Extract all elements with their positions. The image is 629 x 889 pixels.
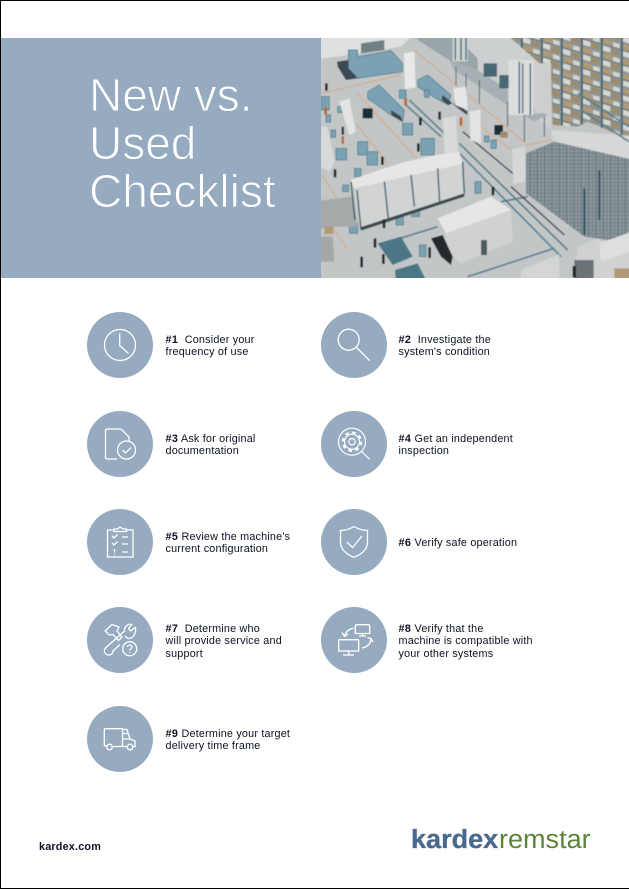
text: item 1: #1 Consider your: [166, 334, 255, 346]
footer website: kardex.com: [39, 841, 101, 853]
text: item 2: #2 Investigate the: [398, 334, 491, 346]
text: item 5: current configuration: [166, 543, 268, 555]
text: item 4: #4 Get an independent: [398, 433, 513, 445]
logo: kardex remstar: kardex: [411, 826, 498, 854]
checklist item 2: [321, 312, 491, 378]
text: item 6: #6 Verify safe operation: [398, 536, 517, 548]
dark machine bases: [337, 60, 468, 122]
icon: clipboard checklist: [87, 509, 153, 575]
high-bay shelving: [498, 27, 629, 145]
title: Checklist: [89, 164, 276, 216]
light floor patch: [551, 130, 629, 170]
wall below large unit: [311, 197, 358, 230]
icon: shield with check: [321, 509, 387, 575]
checklist item 7: [87, 607, 282, 673]
factory floor: [311, 27, 629, 290]
checklist item 1: [87, 312, 255, 378]
text: item 8: #8 Verify that the: [398, 623, 484, 635]
checklist item 5: [87, 509, 290, 575]
text: item 7: #7 Determine who: [166, 623, 260, 635]
text: item 5: [166, 531, 290, 555]
icon: magnifying glass: [321, 312, 387, 378]
back walls: [311, 27, 551, 130]
text: item 7: will provide service and: [166, 635, 282, 647]
text: item 9: delivery time frame: [166, 740, 260, 752]
dark conveyor belt: [463, 132, 564, 235]
text: item 4: inspection: [398, 445, 449, 457]
text: item 8: machine is compatible with: [398, 635, 533, 647]
text: item 2: [398, 334, 491, 358]
text: item 3: #3 Ask for original: [166, 433, 256, 445]
title: New vs.: [89, 68, 253, 120]
icon: crossed tools with question mark: [87, 607, 153, 673]
forklifts: [363, 108, 508, 138]
logo: kardex remstar: [411, 826, 590, 854]
conveyors: [384, 93, 629, 277]
logo: kardex remstar: remstar: [498, 826, 590, 854]
text: item 5: #5 Review the machine's: [166, 531, 290, 543]
checklist item 8: [321, 607, 533, 673]
high-bay rack: [526, 142, 629, 245]
text: item 1: [166, 334, 255, 358]
text: item 8: your other systems: [398, 648, 493, 660]
icon: clock: [87, 312, 153, 378]
title: Used: [89, 116, 196, 168]
teal machines: [321, 50, 496, 257]
warehouse illustration: [321, 38, 629, 278]
large white enclosure: [350, 152, 464, 231]
text: item 2: system's condition: [398, 346, 490, 358]
checklist item 9: [87, 706, 290, 772]
text: item 1: frequency of use: [166, 346, 249, 358]
checklist item 3: [87, 411, 256, 477]
icon: document with check: [87, 411, 153, 477]
header panel: [1, 38, 321, 278]
lower workstations: [311, 227, 629, 283]
text: item 9: [166, 728, 290, 752]
workers: [324, 83, 576, 277]
floor markings: [321, 50, 551, 250]
checklist item 6: [321, 509, 517, 575]
text: item 7: support: [166, 648, 203, 660]
title: [89, 68, 276, 216]
text: item 3: [166, 433, 256, 457]
text: item 4: [398, 433, 513, 457]
icon: connected monitors: [321, 607, 387, 673]
second white enclosure: [431, 197, 513, 265]
text: item 8: [398, 623, 533, 660]
text: item 9: #9 Determine your target: [166, 728, 290, 740]
text: item 7: [166, 623, 282, 660]
checklist item 4: [321, 411, 513, 477]
white columns: [321, 52, 526, 184]
icon: gear magnifier: [321, 411, 387, 477]
icon: delivery truck: [87, 706, 153, 772]
text: item 3: documentation: [166, 445, 239, 457]
mezzanine: [449, 27, 551, 142]
